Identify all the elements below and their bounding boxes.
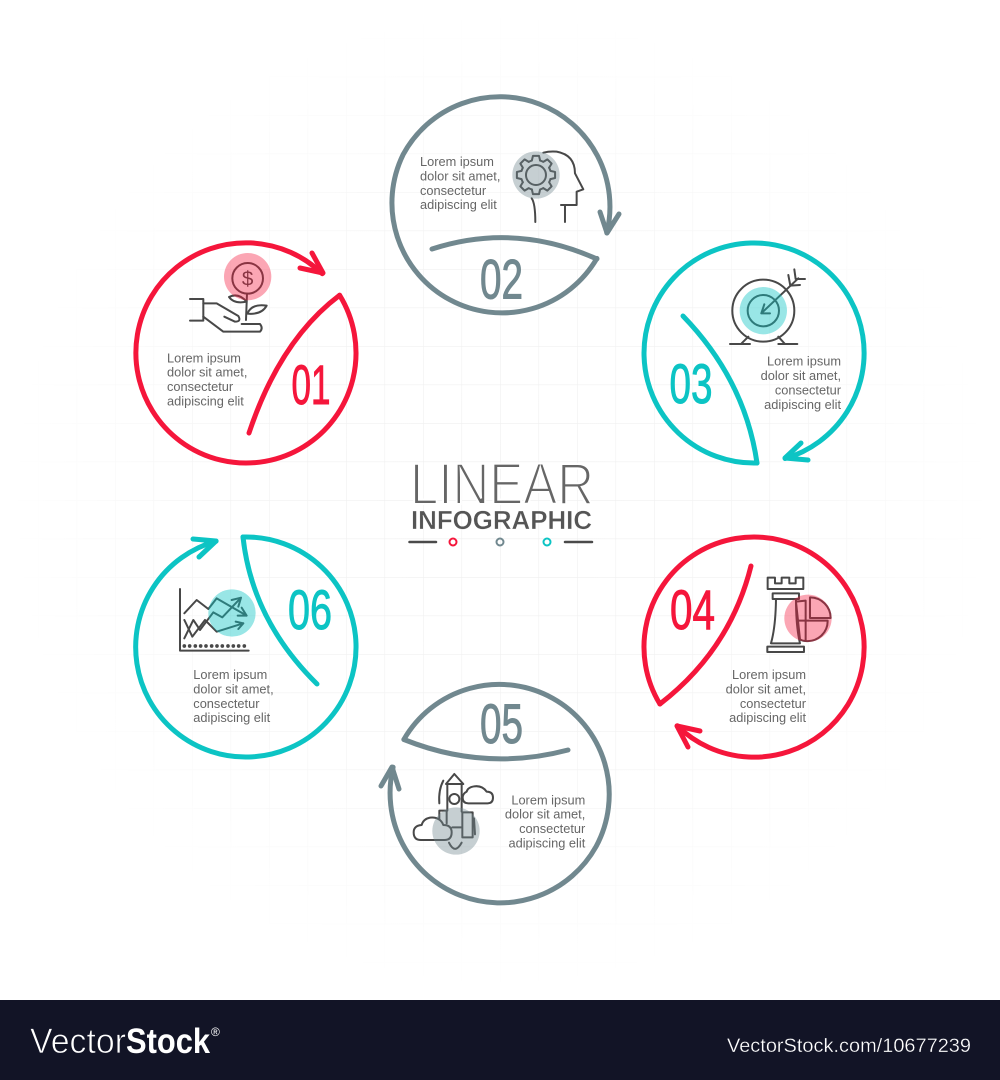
text block 06: consectetur (193, 696, 260, 711)
panel: step 03 (644, 243, 864, 463)
text block 03: consectetur (775, 382, 842, 398)
icon highlight disc (224, 253, 271, 300)
icon: target with arrow (730, 269, 805, 344)
icon: rocket and clouds (414, 774, 493, 855)
text block 05: consectetur (519, 821, 586, 836)
image id: VectorStock.com/10677239 (727, 1036, 971, 1057)
text block 02: consectetur (420, 183, 487, 198)
icon: chess rook with pie chart (767, 578, 832, 652)
text block 05: adipiscing elit (508, 836, 586, 850)
text block 05: Lorem ipsum (511, 792, 585, 807)
number 06: 06 (288, 579, 332, 641)
text block 01: adipiscing elit (167, 394, 244, 408)
number 04: 04 (670, 579, 715, 641)
icon highlight disc (740, 287, 787, 334)
text block 06: dolor sit amet, (193, 681, 274, 696)
logo: Stock: Stock (126, 1022, 210, 1061)
text block 04: Lorem ipsum (732, 667, 806, 682)
teal ring with arrow and leaf (644, 243, 864, 463)
text block 03: Lorem ipsum (767, 354, 841, 369)
text block 02: dolor sit amet, (420, 168, 500, 183)
grey ring with arrow and leaf (392, 97, 619, 313)
text block 03: dolor sit amet, (761, 368, 841, 383)
red ring with arrow and leaf (644, 537, 864, 757)
icon highlight disc (784, 595, 832, 642)
divider with coloured dots (410, 538, 592, 546)
panel: step 06 (136, 537, 356, 757)
central title (410, 452, 594, 546)
logo: registered mark: ® (211, 1025, 220, 1039)
axis dots (182, 644, 246, 648)
footer bar (0, 1000, 1000, 1080)
panel: step 02 (392, 97, 619, 313)
text block 04: dolor sit amet, (726, 681, 806, 696)
panel: step 05 (381, 684, 609, 903)
text block 02: Lorem ipsum (420, 154, 494, 169)
teal ring with arrow and leaf (136, 537, 356, 757)
panel: step 04 (644, 537, 864, 757)
number 05: 05 (480, 693, 523, 755)
text block 06: adipiscing elit (193, 710, 271, 725)
text block 04: consectetur (740, 696, 807, 711)
text block 02: adipiscing elit (420, 197, 497, 212)
text block 03: adipiscing elit (764, 397, 841, 412)
icon detail: dollar sign: $ (242, 268, 254, 291)
text block 04: adipiscing elit (729, 710, 806, 725)
text block 01: Lorem ipsum (167, 350, 241, 365)
heading: INFOGRAPHIC: INFOGRAPHIC (411, 505, 592, 535)
text block 01: consectetur (167, 379, 234, 394)
icon highlight disc (512, 151, 560, 199)
number 03: 03 (670, 353, 712, 415)
icon: hand holding dollar plant (190, 253, 271, 332)
icon highlight disc (432, 807, 480, 855)
icon highlight disc (208, 589, 256, 637)
grey ring with arrow and leaf (381, 684, 609, 903)
text block 06: Lorem ipsum (193, 667, 267, 682)
number 02: 02 (480, 248, 523, 310)
icon: line chart with arrows (180, 589, 256, 651)
heading: LINEAR: LINEAR (410, 452, 594, 517)
text block 05: dolor sit amet, (505, 807, 585, 822)
text block 01: dolor sit amet, (167, 365, 247, 380)
logo: Vector: Vector (30, 1022, 126, 1061)
panel: step 01 (136, 243, 356, 463)
number 01: 01 (292, 354, 330, 416)
icon: head with gear (512, 151, 583, 222)
red ring with arrow and leaf (136, 243, 356, 463)
